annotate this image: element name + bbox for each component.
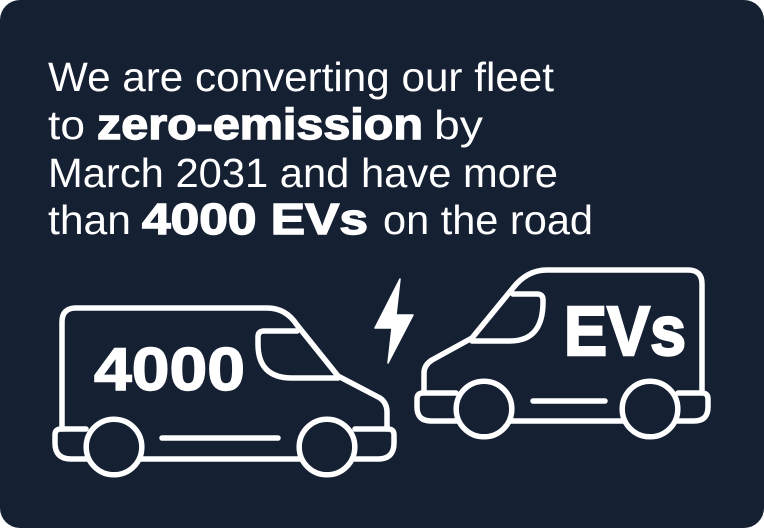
heading text: than — [48, 197, 131, 243]
heading text: to — [48, 102, 85, 148]
heading text: March 2031 and have more — [48, 150, 558, 196]
right van rear wheel — [622, 381, 678, 437]
left van label: 4000 — [94, 336, 245, 403]
heading text: on the road — [383, 197, 593, 243]
heading text: We are converting our fleet — [48, 54, 555, 100]
heading text: zero-emission — [97, 100, 423, 149]
icon: left van — [55, 308, 394, 475]
right van front wheel — [456, 381, 512, 437]
heading text — [48, 54, 593, 244]
heading text: by — [434, 102, 484, 148]
right van label: EVs — [564, 292, 686, 370]
icon: right van — [417, 270, 708, 437]
left van rear wheel — [86, 419, 142, 475]
heading text: 4000 EVs — [142, 195, 368, 244]
left van front wheel — [299, 419, 355, 475]
icon: lightning bolt — [375, 279, 413, 363]
